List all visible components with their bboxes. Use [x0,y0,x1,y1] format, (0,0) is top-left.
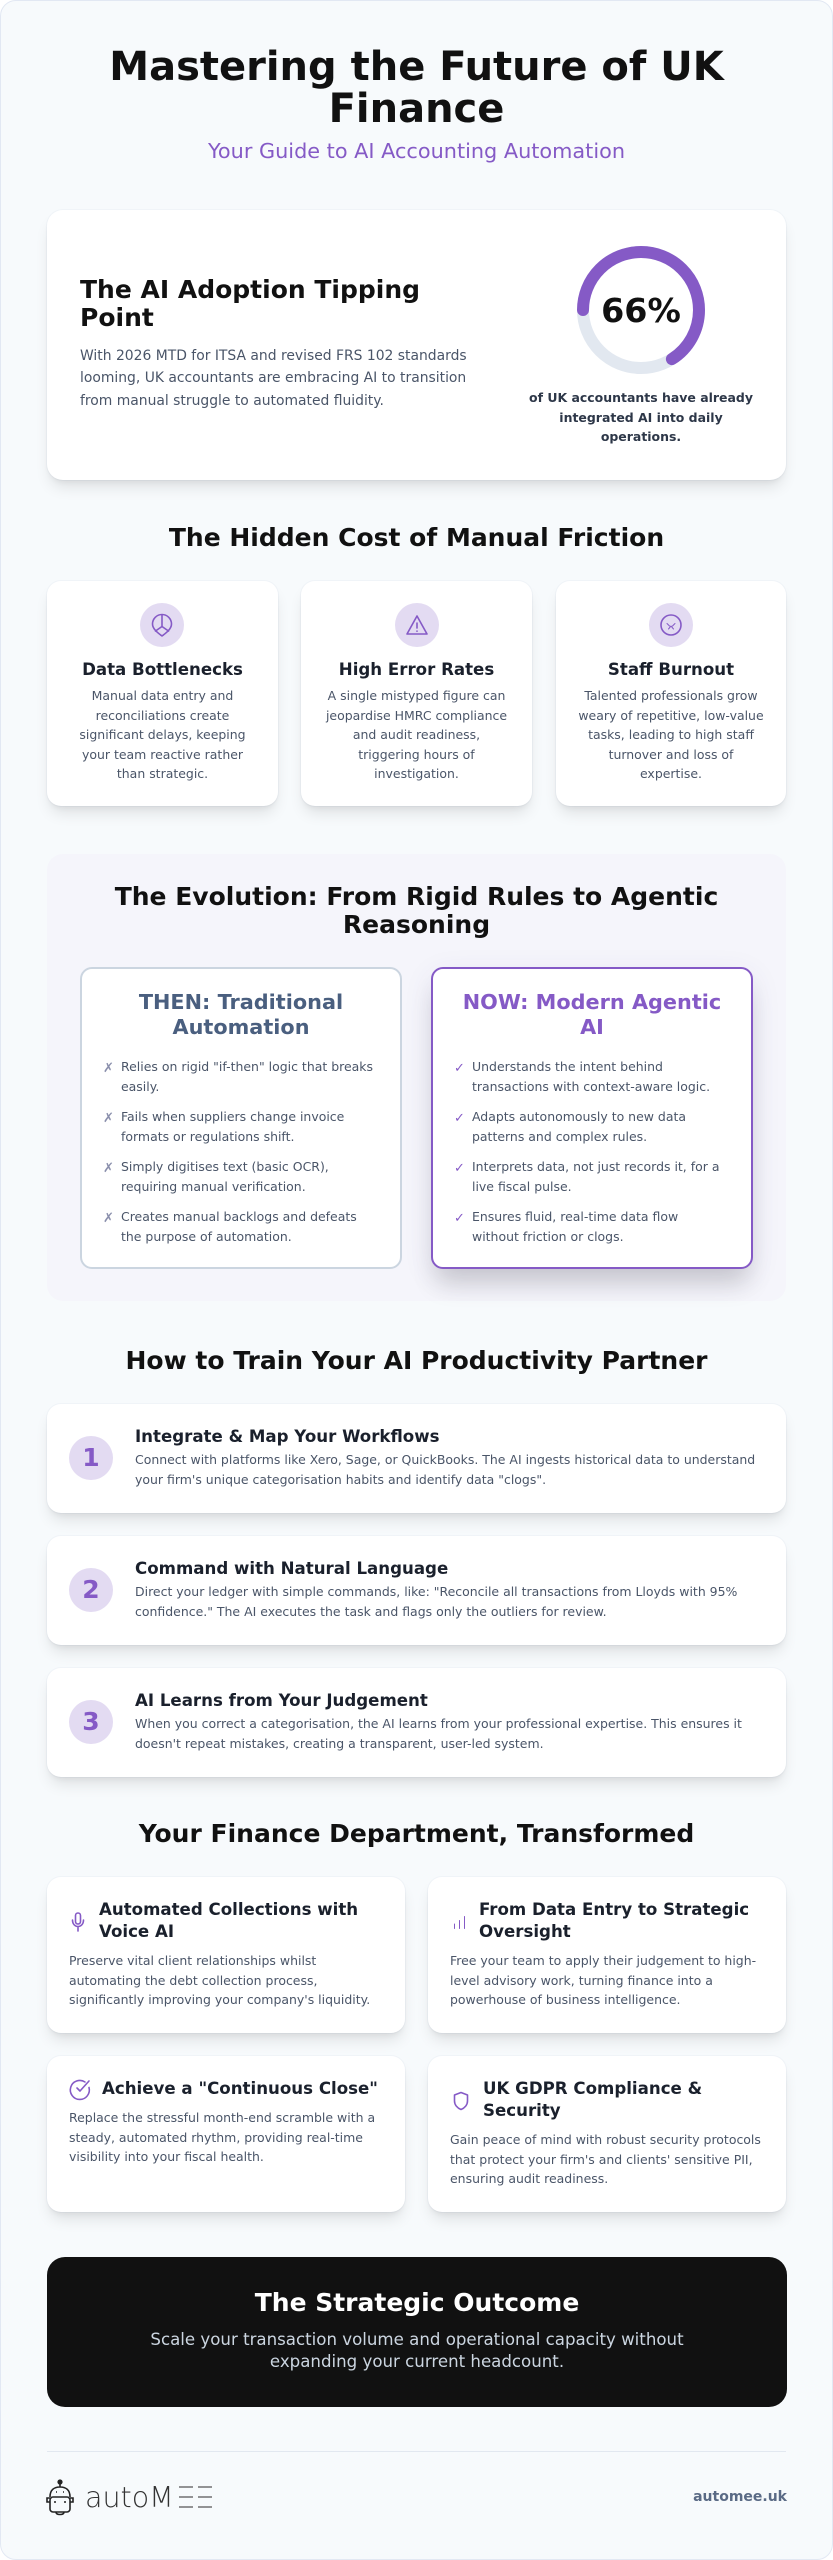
now heading: AI [580,1015,604,1039]
then heading: THEN: Traditional [139,990,343,1014]
heading: AI adoption: The AI Adoption Tipping [80,275,420,304]
now heading: NOW: Modern Agentic [463,990,721,1014]
step 1 [47,1404,786,1513]
step title: Command with Natural Language [135,1559,448,1578]
now list: Adapts autonomously to new data [472,1109,686,1124]
donut caption: operations. [601,429,681,444]
then list: ✗ [103,1061,114,1076]
body: Replace the stressful month-end scramble with a [69,2110,375,2125]
heading: AI adoption [80,275,420,332]
callout body [150,2330,684,2371]
subtitle: Your Guide to AI Accounting Automation [208,139,625,163]
body: steady, automated rhythm, providing real-time [69,2130,363,2144]
body [326,688,507,781]
title: Automated Collections with [99,1900,358,1919]
icon: bottleneck pin [140,603,184,647]
now list: ✓ [454,1061,465,1076]
step number: 2 [82,1575,100,1604]
body: Gain peace of mind with robust security protocols [450,2132,761,2147]
benefit: continuous close [47,2056,405,2212]
body text: AI adoption: from manual struggle to automated fluidity. [80,393,384,409]
body [450,2132,761,2186]
step body: Connect with platforms like Xero, Sage, or QuickBooks. The AI ingests historical data to understand [135,1452,755,1467]
body: A single mistyped figure can [328,688,505,703]
now list [454,1059,719,1244]
step body: When you correct a categorisation, the AI learns from your professional expertise. This ensures it [135,1716,742,1731]
heading: transformed: Your Finance Department, Transformed [139,1819,694,1848]
now list: ✓ [454,1211,465,1226]
body text: AI adoption: With 2026 MTD for ITSA and revised FRS 102 standards [80,348,467,364]
step body [135,1584,737,1618]
now list: transactions with context-aware logic. [472,1078,710,1094]
then list: easily. [121,1078,159,1094]
step body [135,1716,742,1750]
now list: Understands the intent behind [472,1059,663,1074]
panel: data bottlenecks [47,581,278,806]
logo: autoMEE [46,2479,212,2516]
then list: formats or regulations shift. [121,1128,294,1144]
body: Talented professionals grow [584,688,758,703]
step body: Direct your ledger with simple commands, like: "Reconcile all transactions from Lloyds with 95% [135,1584,737,1599]
body: tasks, leading to high staff [588,727,754,742]
step number: 1 [82,1443,100,1472]
title: Voice AI [99,1922,174,1941]
body text: AI adoption [80,348,467,409]
icon: tired face [649,603,693,647]
icon: bars [454,1916,465,1929]
chart: 66% donut [577,246,705,374]
body: Free your team to apply their judgement to high- [450,1953,756,1968]
body text: AI adoption: looming, UK accountants are embracing AI to transition [80,370,466,386]
title [109,44,725,132]
panel: staff burnout [556,581,786,806]
card: then [80,967,402,1269]
body: powerhouse of business intelligence. [450,1992,680,2007]
icon: shield [454,2092,468,2110]
step body: your firm's unique categorisation habits and identify data "clogs". [135,1472,546,1486]
benefit: strategic oversight [428,1877,786,2033]
body: jeopardise HMRC compliance [326,708,507,722]
heading: evolution: The Evolution: From Rigid Rules to Agentic [115,882,718,911]
panel: AI adoption tipping point [47,210,786,480]
now list: patterns and complex rules. [472,1128,647,1144]
body: and audit readiness, [353,727,480,742]
now list: ✓ [454,1161,465,1176]
now list: ✓ [454,1111,465,1126]
then list: ✗ [103,1161,114,1176]
heading: how to train: How to Train Your AI Productivity Partner [125,1346,708,1375]
callout body: Scale your transaction volume and operational capacity without [150,2330,684,2349]
step 2 [47,1536,786,1645]
card: now [431,967,753,1269]
body [79,688,246,781]
benefit: voice AI [47,1877,405,2033]
heading: AI adoption: Point [80,303,154,332]
body: than strategic. [117,766,208,781]
title: Staff Burnout [608,660,734,679]
body: significantly improving your company's liquidity. [69,1992,370,2007]
then list: Creates manual backlogs and defeats [121,1209,357,1224]
donut caption: of UK accountants have already [529,390,753,405]
body: visibility into your fiscal health. [69,2149,264,2164]
then list: Fails when suppliers change invoice [121,1109,344,1124]
body: turnover and loss of [609,746,733,762]
title: UK GDPR Compliance & [483,2079,702,2098]
step title: AI Learns from Your Judgement [135,1691,428,1710]
body [69,2110,375,2164]
body: that protect your firm's and clients' sensitive PII, [450,2152,753,2166]
step 3 [47,1668,786,1777]
icon: microphone [72,1912,84,1932]
title: Mastering the Future of UK [109,44,724,90]
panel: high error rates [301,581,532,806]
body: ensuring audit readiness. [450,2171,608,2186]
title [99,1900,358,1941]
donut caption [529,390,753,444]
title: Finance [329,86,504,132]
title: Achieve a "Continuous Close" [102,2079,378,2098]
icon: check circle [70,2080,90,2100]
callout title: The Strategic Outcome [255,2288,579,2317]
body: significant delays, keeping [79,727,246,742]
body: weary of repetitive, low-value [578,708,764,722]
title: Data Bottlenecks [82,660,243,679]
step body: doesn't repeat mistakes, creating a transparent, user-led system. [135,1736,544,1750]
callout body: expanding your current headcount. [270,2352,564,2371]
step body: confidence." The AI executes the task and flags only the outliers for review. [135,1604,607,1618]
step title: Integrate & Map Your Workflows [135,1427,439,1446]
now list: live fiscal pulse. [472,1178,572,1194]
now heading [463,990,721,1039]
then heading: Automation [172,1015,310,1039]
footer divider [47,2451,786,2452]
body [578,688,764,781]
heading: evolution [114,882,718,939]
body: Manual data entry and [92,688,233,703]
footer url: automee.uk [693,2489,787,2505]
now list: Interprets data, not just records it, for a [472,1159,719,1174]
then list: requiring manual verification. [121,1178,306,1194]
benefit: GDPR [428,2056,786,2212]
wordmark E bars [179,2487,212,2507]
body: your team reactive rather [82,746,243,762]
callout: strategic outcome [47,2257,787,2407]
body: reconciliations create [96,708,229,722]
then list: ✗ [103,1211,114,1226]
body [69,1953,370,2007]
then list: Simply digitises text (basic OCR), [121,1159,329,1174]
then heading [138,990,343,1039]
panel: evolution [47,854,786,1301]
body: investigation. [374,766,459,781]
body [450,1953,756,2007]
body: Preserve vital client relationships whilst [69,1953,316,1968]
step number [69,1436,113,1480]
now list: Ensures fluid, real-time data flow [472,1209,678,1224]
step body [135,1452,755,1486]
body: triggering hours of [358,746,475,762]
body: expertise. [640,766,702,781]
body: automating the debt collection process, [69,1972,317,1988]
title: High Error Rates [339,660,494,679]
step number [69,1568,113,1612]
chart: 66% donut: 66% [601,291,681,330]
step number [69,1700,113,1744]
title [479,1900,749,1941]
icon: robot [47,2480,73,2514]
then list: Relies on rigid "if-then" logic that breaks [121,1059,373,1074]
title: Security [483,2101,561,2120]
step number: 3 [82,1707,100,1736]
now list: without friction or clogs. [472,1228,624,1244]
then list: the purpose of automation. [121,1228,292,1244]
then list [103,1059,373,1244]
donut caption: integrated AI into daily [559,410,723,424]
wordmark: autoMEE [85,2481,210,2514]
title [483,2079,702,2120]
then list: ✗ [103,1111,114,1126]
title: From Data Entry to Strategic [479,1900,749,1919]
icon: warning triangle [395,603,439,647]
heading: evolution: Reasoning [343,910,490,939]
heading: hidden cost: The Hidden Cost of Manual Friction [169,523,664,552]
body: level advisory work, turning finance into a [450,1972,713,1988]
title: Oversight [479,1922,571,1941]
